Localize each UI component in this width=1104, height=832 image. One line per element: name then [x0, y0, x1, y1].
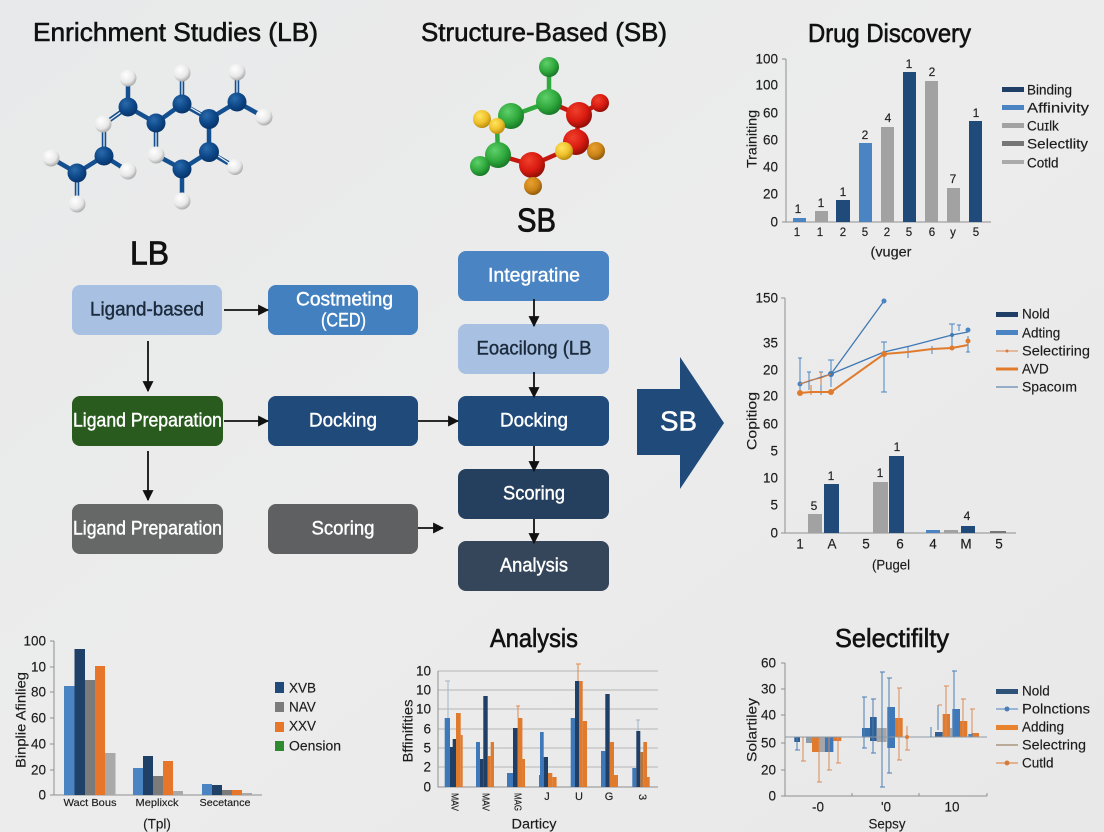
icon: ligand molecule — [42, 64, 272, 212]
chart: line and bar panel: M — [960, 536, 972, 552]
flow: analysis box — [458, 541, 609, 591]
legend: line and bar panel — [996, 306, 1090, 394]
chart: drug discovery bars: 1 — [973, 106, 980, 120]
chart: drug discovery bars: 100 — [755, 52, 778, 66]
chart: line and bar panel: 20 — [763, 388, 778, 404]
chart: selectivity bars with error bars: 0 — [768, 788, 776, 804]
title: Enrichment Studies (LB): Enrichment Studies (LB) — [33, 17, 318, 47]
arrow: large SB arrow — [637, 357, 724, 489]
chart: line and bar panel: 5 — [811, 499, 818, 513]
chart: selectivity bars with error bars: 60 — [761, 656, 776, 670]
chart: line and bar panel: 4 — [964, 509, 971, 523]
flow: scoring box right: Scoring — [503, 484, 565, 504]
legend: line and bar panel: Spacoım — [1022, 380, 1077, 394]
arrows: flow connectors — [148, 299, 534, 543]
chart: affinities grouped bars: J — [544, 791, 550, 803]
chart: drug discovery bars: 1 — [795, 202, 802, 216]
flow: costmeting box — [268, 285, 418, 335]
chart: binding affinity bars: 60 — [31, 710, 46, 726]
chart: drug discovery bars: 1 — [817, 227, 823, 239]
flow: eoacilong box — [458, 324, 609, 374]
flow: costmeting box: Costmeting — [296, 290, 393, 310]
legend: selectivity: Cutld — [1022, 756, 1054, 770]
chart: line and bar panel: 6 — [896, 536, 904, 552]
flow: green ligand preparation box — [72, 396, 223, 446]
y axis title: Bffinifities — [400, 699, 416, 762]
legend: selectivity: Selectring — [1022, 738, 1086, 752]
x axis title: Darticy — [512, 816, 557, 832]
flow: gray scoring box: Scoring — [312, 518, 374, 540]
chart: drug discovery bars: 1 — [840, 185, 847, 199]
chart: affinities grouped bars: 5 — [423, 740, 431, 756]
flow: docking box left: Docking — [309, 410, 377, 432]
chart: line and bar panel: 5 — [862, 536, 870, 552]
flow: scoring box right — [458, 469, 609, 519]
title: Analysis: Analysis — [490, 623, 578, 653]
chart: line and bar panel: 10 — [763, 470, 778, 486]
chart: binding affinity bars: 10 — [31, 660, 46, 674]
flow: eoacilong box: Eoacilong (LB — [476, 338, 592, 360]
flow: green ligand preparation box: Ligand Preparation — [73, 410, 222, 432]
legend: binding affinity: XVB — [289, 680, 316, 696]
legend: binding affinity — [275, 680, 341, 754]
chart: drug discovery bars: 1 — [818, 196, 825, 210]
chart: binding affinity bars: Wact Bous — [64, 797, 116, 809]
chart: drug discovery bars: 1 — [794, 227, 800, 239]
flow: ligand-based box — [72, 285, 222, 335]
chart: selectivity bars with error bars: 50 — [761, 736, 776, 750]
legend: binding affinity: XXV — [289, 718, 316, 734]
x axis title: Sepsy — [868, 816, 906, 832]
legend: line and bar panel: Adting — [1022, 326, 1060, 340]
chart: affinities grouped bars: 0 — [423, 780, 431, 794]
chart: selectivity bars with error bars: -0 — [812, 800, 824, 814]
flow: analysis box: Analysis — [500, 556, 568, 576]
chart: line and bar panel: 20 — [763, 362, 778, 378]
chart: line and bar panel: 35 — [763, 336, 778, 350]
chart: selectivity bars with error bars: '0 — [881, 800, 891, 814]
chart: drug discovery bars: 1 — [906, 57, 913, 71]
chart: binding affinity bars: 0 — [38, 788, 46, 802]
legend: line and bar panel: Selectiring — [1022, 344, 1090, 358]
chart: drug discovery bars: 5 — [906, 227, 912, 239]
chart: line and bar panel: 150 — [755, 290, 778, 306]
flow: docking box left — [268, 396, 418, 446]
flow: gray scoring box — [268, 504, 418, 554]
x axis title: (Pugel — [872, 558, 910, 572]
legend: drug discovery — [1002, 82, 1089, 170]
bars — [808, 514, 822, 533]
chart: drug discovery bars: 4 — [885, 111, 892, 125]
chart: line and bar panel: 1 — [796, 536, 804, 552]
legend: drug discovery: Cuɪlk — [1027, 118, 1059, 134]
chart: affinities grouped bars: 6 — [423, 722, 431, 736]
chart: drug discovery bars: 100 — [755, 78, 778, 92]
flow: integratine box — [458, 251, 609, 301]
chart: line and bar panel: 5 — [770, 444, 778, 458]
chart: affinities grouped bars: 2 — [423, 760, 431, 774]
chart: affinities grouped bars: U — [575, 791, 583, 803]
flow: gray ligand preparation box: Ligand Preparation — [73, 518, 222, 540]
chart: drug discovery bars: 2 — [884, 227, 890, 239]
chart: affinities grouped bars: G — [605, 791, 613, 803]
chart: drug discovery bars — [744, 52, 991, 260]
flow: costmeting box: (CED) — [321, 310, 366, 332]
legend: selectivity: Adding — [1022, 720, 1064, 734]
chart: affinities grouped bars: 10 — [416, 682, 431, 698]
chart: affinities grouped bars — [400, 664, 658, 832]
chart: drug discovery bars: 2 — [929, 65, 936, 79]
chart: binding affinity bars: 40 — [31, 736, 46, 752]
icon: structure molecule — [470, 57, 609, 195]
chart: drug discovery bars: 60 — [763, 106, 778, 120]
chart: affinities grouped bars: 10 — [416, 664, 431, 678]
chart: line and bar panel: 1 — [894, 440, 901, 454]
chart: drug discovery bars: 6 — [929, 227, 935, 239]
legend: selectivity: Nold — [1022, 684, 1050, 698]
chart: affinities grouped bars: MAG — [512, 793, 522, 811]
flow: gray ligand preparation box — [72, 504, 223, 554]
chart: line and bar panel — [744, 290, 1016, 572]
legend: line and bar panel: AVD — [1022, 362, 1049, 376]
chart: drug discovery bars: 20 — [763, 186, 778, 202]
chart: drug discovery bars: 40 — [763, 160, 778, 174]
chart: binding affinity bars: 100 — [23, 634, 46, 648]
y axis title: Solartiley — [744, 698, 760, 762]
chart: line and bar panel: 60 — [763, 416, 778, 432]
legend: drug discovery: Binding — [1027, 82, 1072, 98]
chart: line and bar panel: 4 — [929, 536, 937, 552]
legend: binding affinity: Oension — [289, 738, 341, 754]
chart: binding affinity bars: 20 — [31, 762, 46, 778]
arrow: large SB arrow: SB — [660, 406, 697, 436]
x axis title: (Tpl) — [143, 816, 171, 832]
legend: selectivity — [996, 684, 1090, 770]
chart: drug discovery bars: 2 — [840, 227, 846, 239]
chart: line and bar panel: 1 — [828, 469, 835, 483]
chart: drug discovery bars: 0 — [770, 214, 778, 230]
y axis title: Trainiting — [744, 110, 760, 168]
blue lines — [800, 301, 968, 384]
chart: selectivity bars with error bars: 20 — [761, 762, 776, 778]
chart: binding affinity bars: Secetance — [200, 797, 251, 809]
title: Drug Discovery: Drug Discovery — [808, 18, 971, 48]
y axis title: Copitiog — [744, 392, 760, 450]
legend: line and bar panel: Nold — [1022, 306, 1050, 322]
y axis title: Binplie Afinlieg — [14, 672, 28, 768]
error bars — [798, 324, 970, 395]
legend: selectivity: Polnctions — [1022, 702, 1090, 716]
title: Structure-Based (SB): Structure-Based (SB) — [421, 17, 667, 47]
legend: drug discovery: Affinivity — [1027, 100, 1089, 116]
x axis title: (vuger — [870, 244, 912, 260]
chart: drug discovery bars: 5 — [973, 227, 979, 239]
chart: selectivity bars with error bars: 10 — [944, 800, 960, 814]
chart: selectivity bars with error bars — [744, 656, 987, 832]
chart: selectivity bars with error bars: 40 — [761, 708, 776, 722]
chart: affinities grouped bars: MAV — [480, 793, 490, 811]
flow: docking box right: Docking — [500, 410, 568, 432]
heading: SB: SB — [517, 202, 556, 238]
chart: line and bar panel: 1 — [877, 466, 884, 480]
chart: line and bar panel: 5 — [770, 498, 778, 512]
heading: LB: LB — [130, 234, 169, 272]
chart: binding affinity bars: Meplixck — [136, 797, 179, 809]
chart: affinities grouped bars: MAV — [448, 793, 460, 811]
chart: binding affinity bars: 80 — [31, 684, 46, 700]
chart: drug discovery bars: 60 — [763, 132, 778, 148]
chart: affinities grouped bars: 10 — [416, 702, 431, 716]
chart: affinities grouped bars: 3 — [636, 794, 648, 800]
flow: docking box right — [458, 396, 609, 446]
legend: binding affinity: NAV — [289, 700, 316, 714]
chart: drug discovery bars: 7 — [950, 172, 957, 186]
legend: drug discovery: Selectlity — [1027, 136, 1088, 152]
chart: binding affinity bars — [14, 634, 262, 832]
flow: ligand-based box: Ligand-based — [90, 300, 204, 320]
chart: line and bar panel: A — [827, 536, 837, 552]
title: Selectifilty: Selectifilty — [835, 623, 949, 653]
legend: drug discovery: Cotld — [1027, 156, 1059, 170]
chart: drug discovery bars: 5 — [862, 227, 868, 239]
chart: line and bar panel: 0 — [770, 526, 778, 540]
orange lines — [800, 374, 831, 384]
chart: selectivity bars with error bars: 30 — [761, 682, 776, 696]
flow: integratine box: Integratine — [488, 266, 580, 286]
chart: line and bar panel: 5 — [995, 536, 1003, 552]
chart: drug discovery bars: y — [950, 227, 956, 239]
chart: drug discovery bars: 2 — [862, 128, 869, 142]
